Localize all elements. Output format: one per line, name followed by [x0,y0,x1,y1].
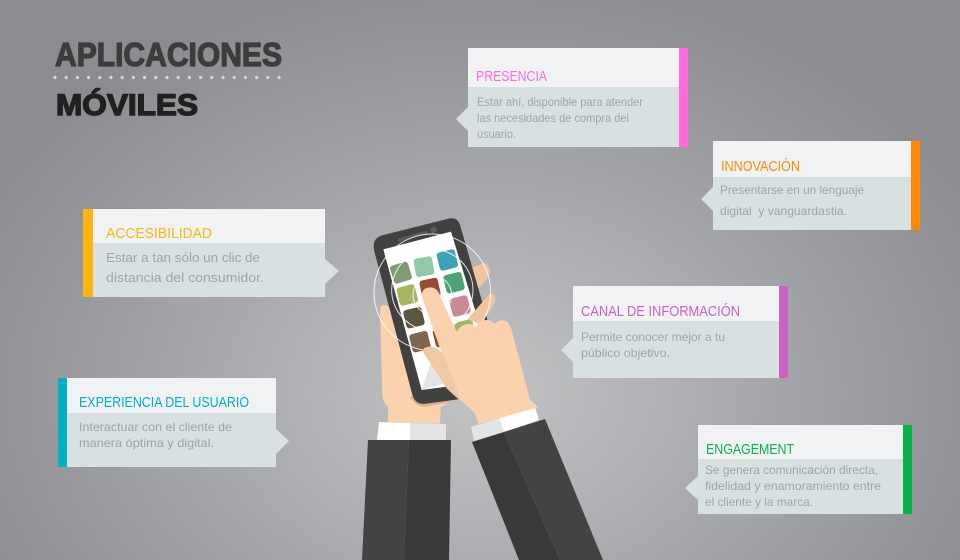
panel: experiencia del usuario: EXPERIENCIA DEL USUARIO [79,395,249,411]
title [53,36,282,122]
panel: engagement [685,425,912,514]
panel: presencia: Estar ahí, disponible para atender [477,95,643,109]
panel: presencia: PRESENCIA [476,69,547,85]
right hand pointing [422,287,538,424]
panel: presencia: usuario. [477,127,516,141]
touch ripple circles [374,234,491,351]
panel: innovación: INNOVACIÓN [721,158,800,175]
title: APLICACIONES [55,36,282,73]
hands and phone illustration [374,218,538,424]
panel: experiencia del usuario [58,378,289,467]
panel: innovación [701,141,920,230]
panel: engagement: ENGAGEMENT [706,442,794,458]
left hand upper finger [470,263,490,293]
panel: experiencia del usuario: manera óptima y digital. [79,436,214,450]
panel: accesibilidad: distancia del consumidor. [106,270,264,285]
panel: accesibilidad: ACCESIBILIDAD [106,226,212,242]
panel: innovación: digital y vanguardastia. [720,204,847,218]
left hand palm [380,305,450,423]
left arm with sleeve [362,422,451,560]
left hand lower finger [467,294,496,325]
panel: experiencia del usuario: Interactuar con el cliente de [79,420,232,434]
panel: canal de información: CANAL DE INFORMACIÓN [581,303,740,320]
thumb [423,347,462,402]
panel: accesibilidad [83,209,339,297]
panel: engagement: el cliente y la marca. [705,495,813,509]
phone [374,218,507,404]
panel: presencia [456,48,688,147]
app icons [389,249,476,353]
right arm with sleeve [471,407,603,560]
title: MÓVILES [56,88,198,122]
panel: engagement: fidelidad y enamoramiento entre [705,479,881,493]
phone shadow [410,397,453,407]
panel: engagement: Se genera comunicación directa, [705,463,878,477]
panel: canal de información [561,286,788,378]
panel: canal de información: público objetivo. [581,346,670,360]
phone screen [383,232,497,390]
panel: accesibilidad: Estar a tan sólo un clic de [106,250,260,265]
phone speaker and camera [399,227,437,240]
panel: canal de información: Permite conocer mejor a tu [581,330,725,344]
panel: presencia: las necesidades de compra del [477,111,629,125]
panel: innovación: Presentarse en un lenguaje [720,183,864,197]
